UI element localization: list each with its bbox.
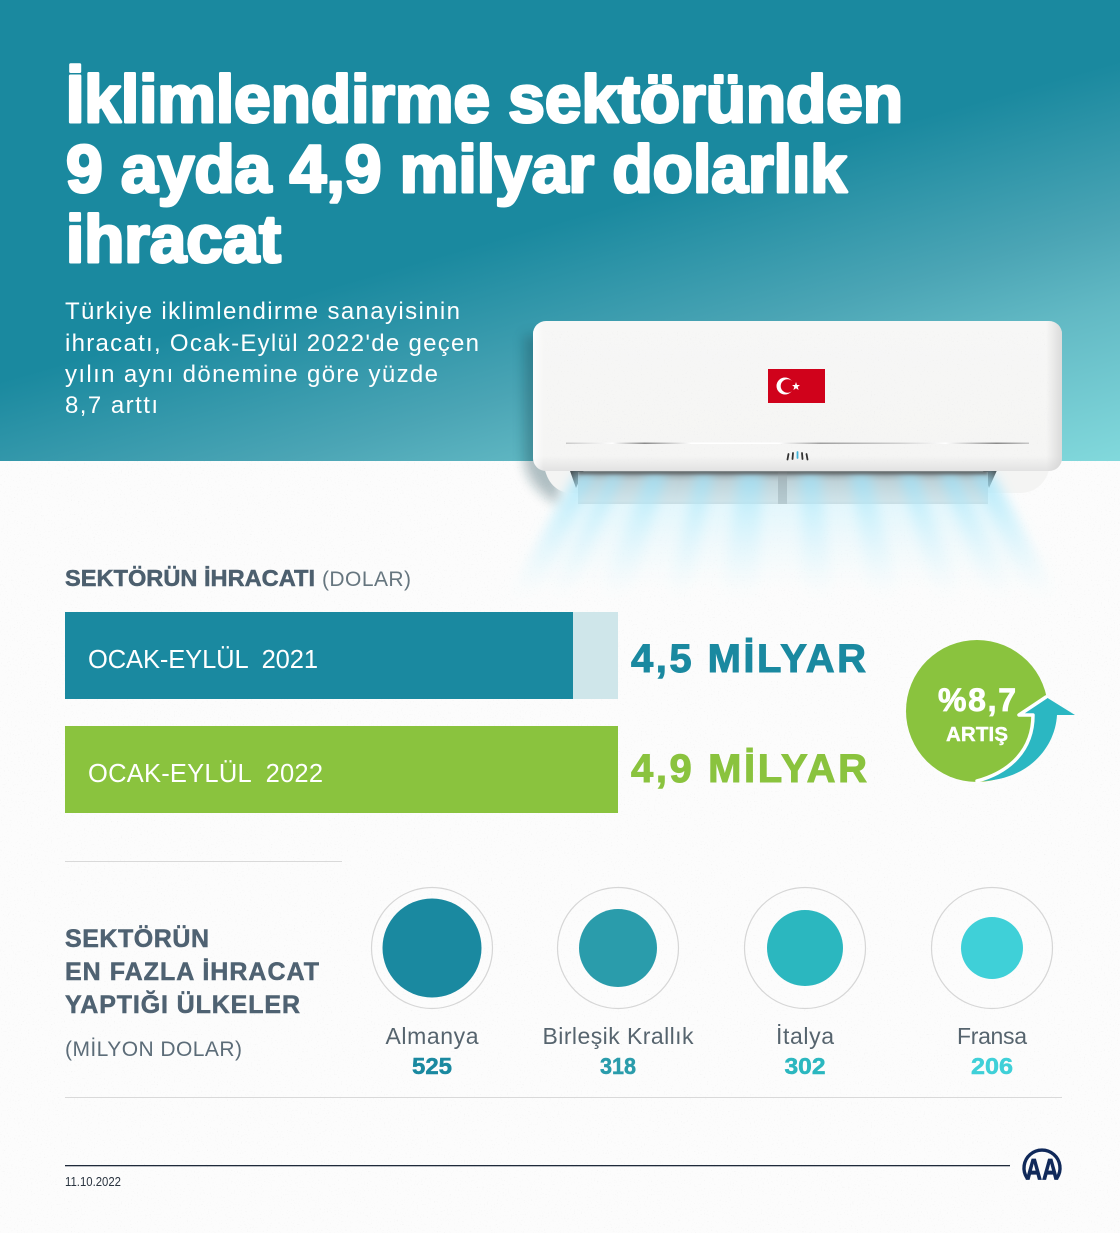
country: Fransa bbox=[932, 888, 1052, 1079]
country: İtalya bbox=[744, 888, 866, 1079]
value: 2022: 4,9 MİLYAR bbox=[631, 747, 867, 791]
subtitle text block: 8,7 arttı bbox=[65, 392, 158, 419]
value: 2021: 4,5 MİLYAR bbox=[631, 637, 866, 681]
growth badge bbox=[906, 640, 1075, 782]
bar: 2021: OCAK-EYLÜL 2021 bbox=[88, 646, 318, 674]
country: Birleşik Krallık: 318 bbox=[600, 1053, 636, 1079]
section heading: top export countries: SEKTÖRÜN bbox=[65, 924, 209, 953]
vent top shadow bbox=[578, 470, 988, 474]
unit body bbox=[533, 321, 1062, 471]
country: İtalya: İtalya bbox=[776, 1023, 834, 1049]
air conditioner illustration bbox=[505, 321, 1062, 600]
growth badge: %8,7 bbox=[938, 682, 1016, 718]
subtitle text block: Türkiye iklimlendirme sanayisinin bbox=[65, 298, 460, 325]
vent divider bbox=[778, 472, 787, 504]
subtitle text block: ihracatı, Ocak-Eylül 2022'de geçen bbox=[65, 330, 479, 357]
header band bbox=[0, 0, 1120, 461]
vent opening bbox=[578, 472, 988, 504]
unit lower housing bbox=[544, 466, 1050, 493]
title: İklimlendirme sektöründen bbox=[66, 62, 903, 137]
subtitle text block bbox=[65, 298, 479, 419]
icon: Turkish flag bbox=[768, 369, 825, 403]
vent corners bbox=[569, 468, 998, 488]
cold air stream bbox=[505, 473, 1061, 600]
country: Birleşik Krallık bbox=[542, 888, 694, 1079]
wall shadow bbox=[524, 335, 560, 505]
title bbox=[66, 62, 903, 277]
country: Fransa: Fransa bbox=[957, 1023, 1027, 1049]
section heading: top export countries bbox=[65, 924, 319, 1061]
growth badge: ARTIŞ bbox=[946, 723, 1008, 746]
bar: 2022 bbox=[65, 726, 618, 813]
section heading: sector exports: (DOLAR) bbox=[322, 568, 411, 591]
icon: up arrow bbox=[977, 697, 1075, 781]
country: Birleşik Krallık: Birleşik Krallık bbox=[542, 1023, 694, 1049]
bar: 2022: OCAK-EYLÜL 2022 bbox=[88, 760, 323, 788]
section heading: top export countries: EN FAZLA İHRACAT bbox=[65, 958, 319, 986]
subtitle text block: yılın aynı dönemine göre yüzde bbox=[65, 361, 438, 388]
indicator lights bbox=[788, 452, 808, 460]
date: 11.10.2022 bbox=[65, 1174, 121, 1189]
section heading: sector exports: SEKTÖRÜN İHRACATI bbox=[65, 565, 315, 591]
section heading: top export countries: YAPTIĞI ÜLKELER bbox=[65, 990, 300, 1019]
country: Almanya bbox=[372, 888, 492, 1079]
country: Fransa: 206 bbox=[971, 1053, 1013, 1079]
section heading: top export countries: (MİLYON DOLAR) bbox=[65, 1038, 242, 1061]
title: ihracat bbox=[66, 202, 281, 277]
bar: 2021 bbox=[65, 612, 618, 699]
unit highlight line bbox=[566, 442, 1029, 444]
country: Almanya: 525 bbox=[412, 1053, 452, 1079]
logo: AA: AA bbox=[1026, 1154, 1058, 1186]
country: Almanya: Almanya bbox=[386, 1023, 479, 1049]
country: İtalya: 302 bbox=[784, 1053, 826, 1079]
title: 9 ayda 4,9 milyar dolarlık bbox=[66, 132, 848, 207]
